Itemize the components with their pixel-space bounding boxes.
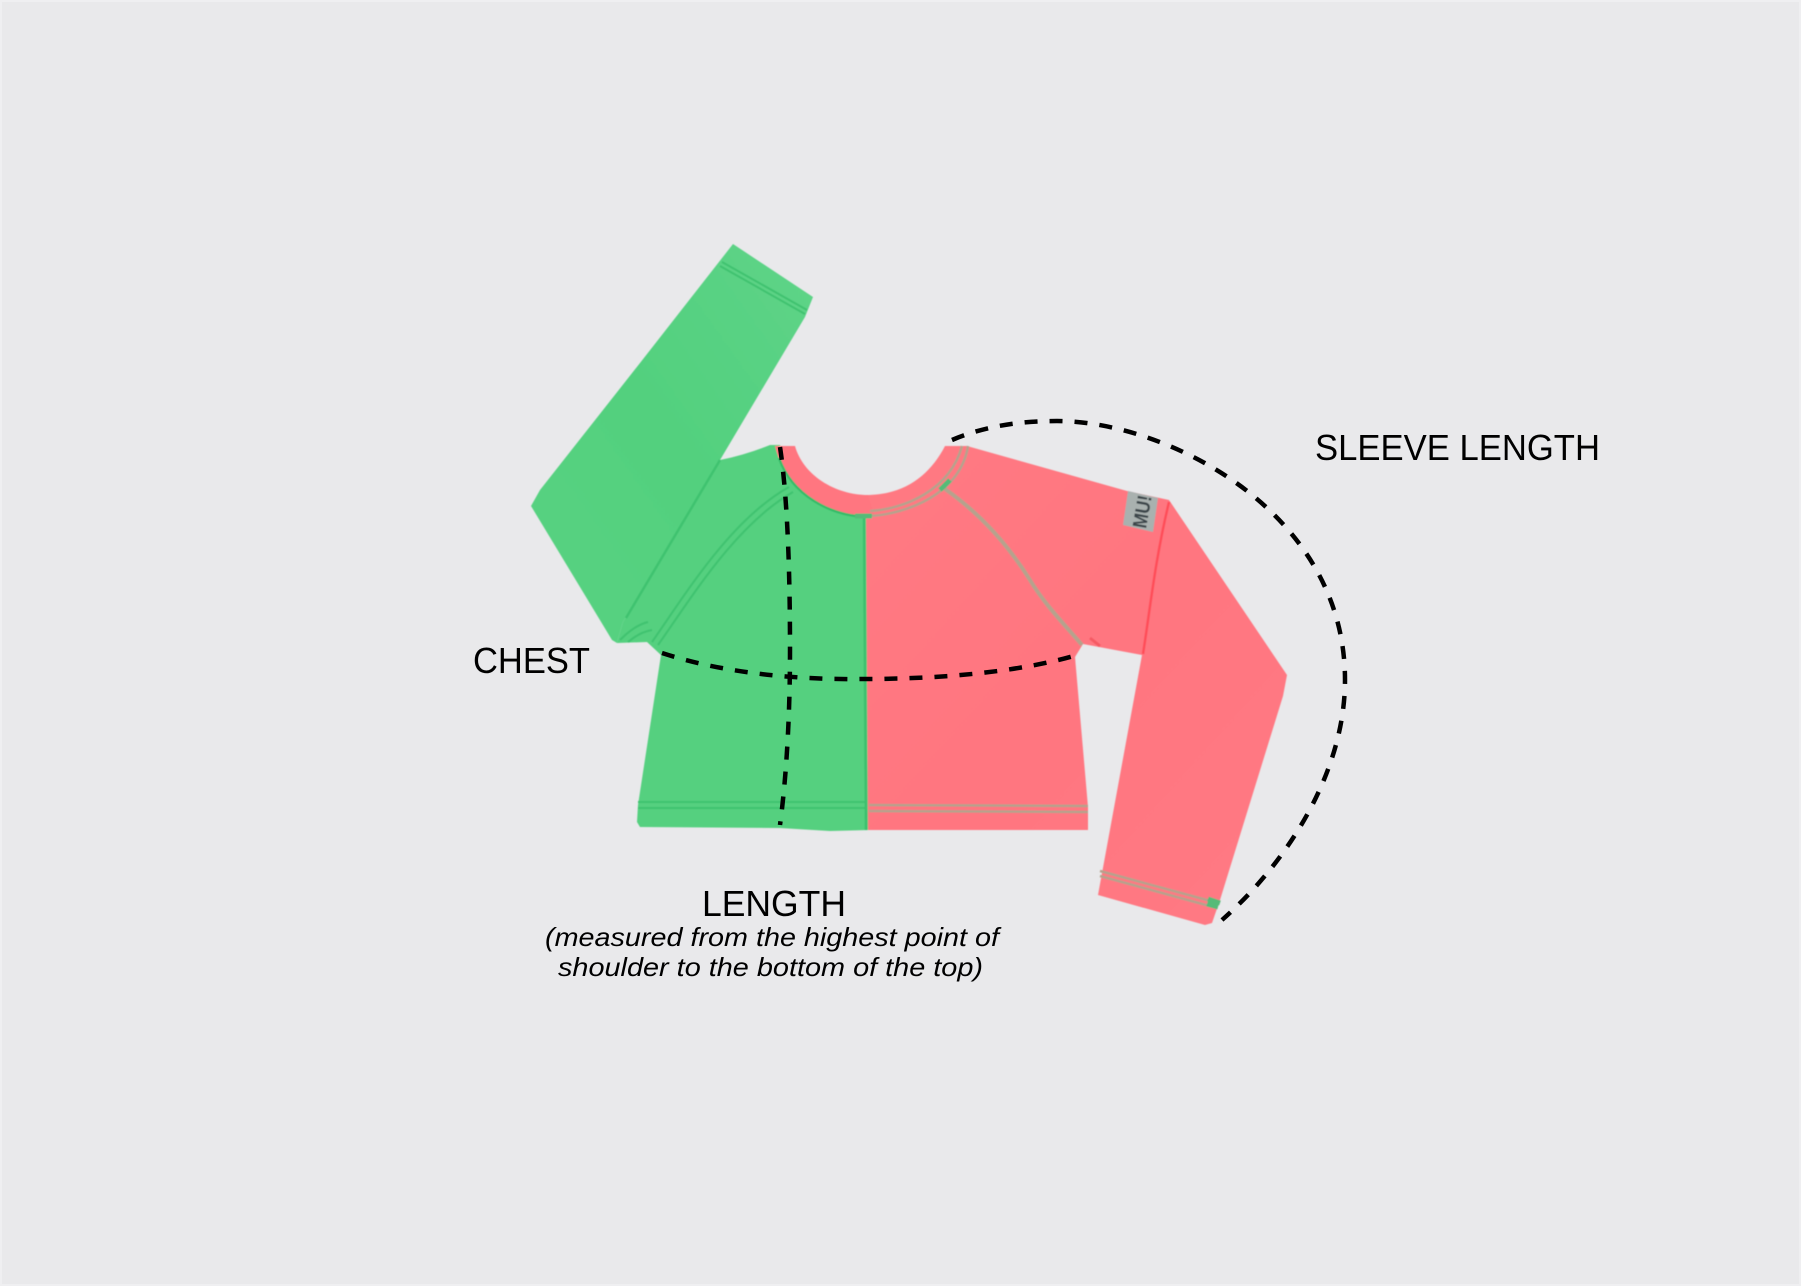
note: how length is measured: shoulder to the bottom of the top): [558, 952, 983, 982]
green stitch tips: [855, 480, 1220, 907]
label: length: [545, 883, 1002, 982]
label: length: LENGTH: [702, 883, 846, 924]
garment: two-tone long-sleeve top: [531, 244, 1287, 925]
pink body and sleeve: [775, 446, 1287, 925]
icon: sleeve logo tag: MU!: [1129, 494, 1157, 530]
pink collar band: [775, 446, 875, 517]
dashed line: chest: [662, 653, 1077, 679]
note: how length is measured: (measured from the highest point of: [545, 922, 1002, 952]
label: chest: CHEST: [473, 640, 590, 681]
green body panel: [617, 445, 870, 831]
label: sleeve length: SLEEVE LENGTH: [1315, 427, 1600, 468]
stitching on pink panels: [869, 446, 1218, 908]
green raised sleeve: [531, 244, 813, 643]
green collar seam: [779, 458, 868, 517]
note: how length is measured: [545, 922, 1002, 982]
dashed line: sleeve length: [952, 421, 1345, 920]
dashed line: length: [780, 447, 790, 825]
